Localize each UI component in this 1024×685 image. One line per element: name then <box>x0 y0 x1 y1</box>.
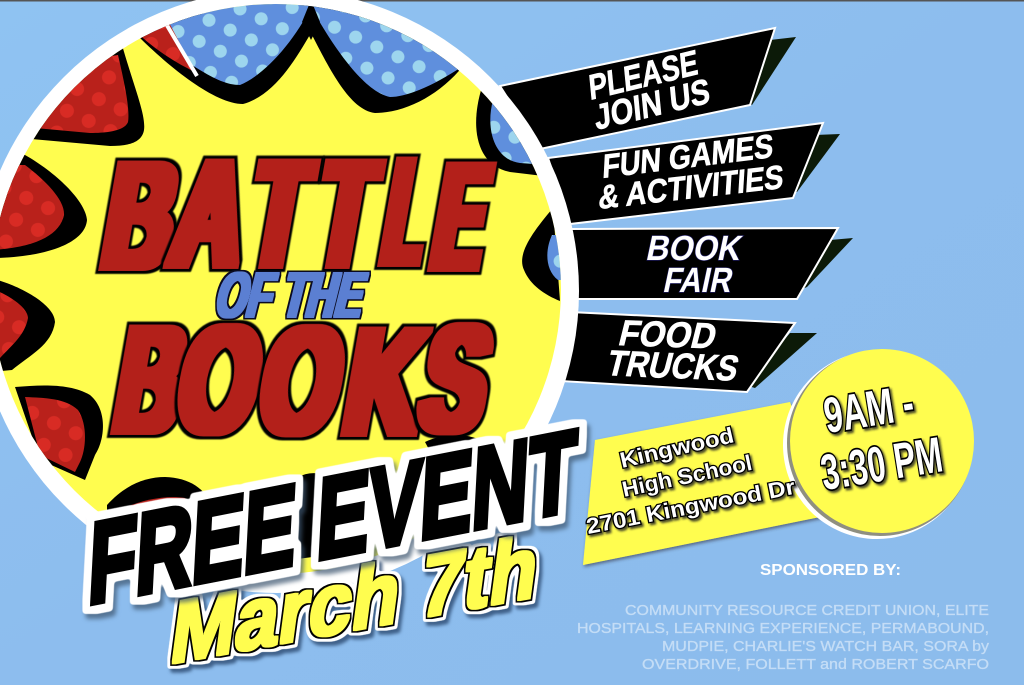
time badge <box>783 349 974 539</box>
title: books <box>105 294 502 467</box>
banner: book fair <box>570 228 838 300</box>
text: food trucks: FOOD <box>615 313 721 356</box>
sponsor list: HOSPITALS, LEARNING EXPERIENCE, PERMABOUND, <box>577 621 989 637</box>
blue lobe right top <box>476 90 538 176</box>
text: food trucks <box>603 313 743 389</box>
title: battle: L <box>374 127 440 297</box>
red lobe lower left <box>15 385 103 480</box>
top lobes <box>140 4 460 113</box>
location text: Kingwood <box>618 422 736 473</box>
blue lobe right <box>522 211 561 301</box>
title: battle: B <box>93 131 189 301</box>
time text: 3:30 PM <box>817 426 946 501</box>
text: fun games and activities: & ACTIVITIES <box>598 159 785 217</box>
bump lower right <box>425 436 476 448</box>
banner: food trucks <box>560 312 795 392</box>
comic burst circle <box>0 0 600 620</box>
location text: 2701 Kingwood Dr <box>584 474 798 539</box>
text: fun games and activities: FUN GAMES <box>602 128 774 186</box>
sponsored by heading: SPONSORED BY: <box>760 562 901 579</box>
title: books: S <box>410 294 502 464</box>
text: fun games and activities <box>598 128 785 217</box>
sponsor list <box>577 603 990 673</box>
time text: 9AM - <box>820 374 918 444</box>
text: book fair: FAIR <box>660 261 737 300</box>
title: of the: OF THE <box>210 259 373 331</box>
red lobe left lower <box>0 278 55 372</box>
text: book fair: BOOK <box>643 229 746 268</box>
sponsor list: COMMUNITY RESOURCE CREDIT UNION, ELITE <box>625 603 989 619</box>
text: food trucks: TRUCKS <box>603 343 743 389</box>
title: books: O <box>249 296 355 466</box>
banner: please join us <box>500 28 775 149</box>
red lobe bottom centre <box>298 473 316 558</box>
headline: march 7th: March 7th <box>165 516 545 683</box>
red lobe left <box>0 155 87 258</box>
banner shadows <box>745 37 853 388</box>
text: please join us: PLEASE <box>587 43 700 108</box>
sponsor list: OVERDRIVE, FOLLETT and ROBERT SCARFO <box>642 657 989 673</box>
location text <box>584 422 798 539</box>
title: battle: A <box>161 129 259 299</box>
location note <box>583 402 830 565</box>
title: battle: T <box>306 129 387 299</box>
banner: fun games <box>548 123 823 224</box>
text: please join us: JOIN US <box>593 71 712 138</box>
title: battle: E <box>423 132 500 302</box>
time text <box>817 374 946 501</box>
sponsor list: MUDPIE, CHARLIE'S WATCH BAR, SORA by <box>662 639 990 655</box>
red lobe top left <box>34 48 144 146</box>
location text: High School <box>620 450 754 502</box>
text: please join us <box>587 43 712 138</box>
title: books: B <box>105 295 197 465</box>
sponsors <box>577 562 990 673</box>
title: books: K <box>334 297 436 467</box>
title: books: O <box>167 295 273 465</box>
title: battle <box>93 127 500 302</box>
title: battle: T <box>239 129 321 299</box>
text: book fair <box>643 229 746 300</box>
headline: free event: FREE EVENT <box>86 406 579 629</box>
red lobe bottom <box>107 477 202 510</box>
